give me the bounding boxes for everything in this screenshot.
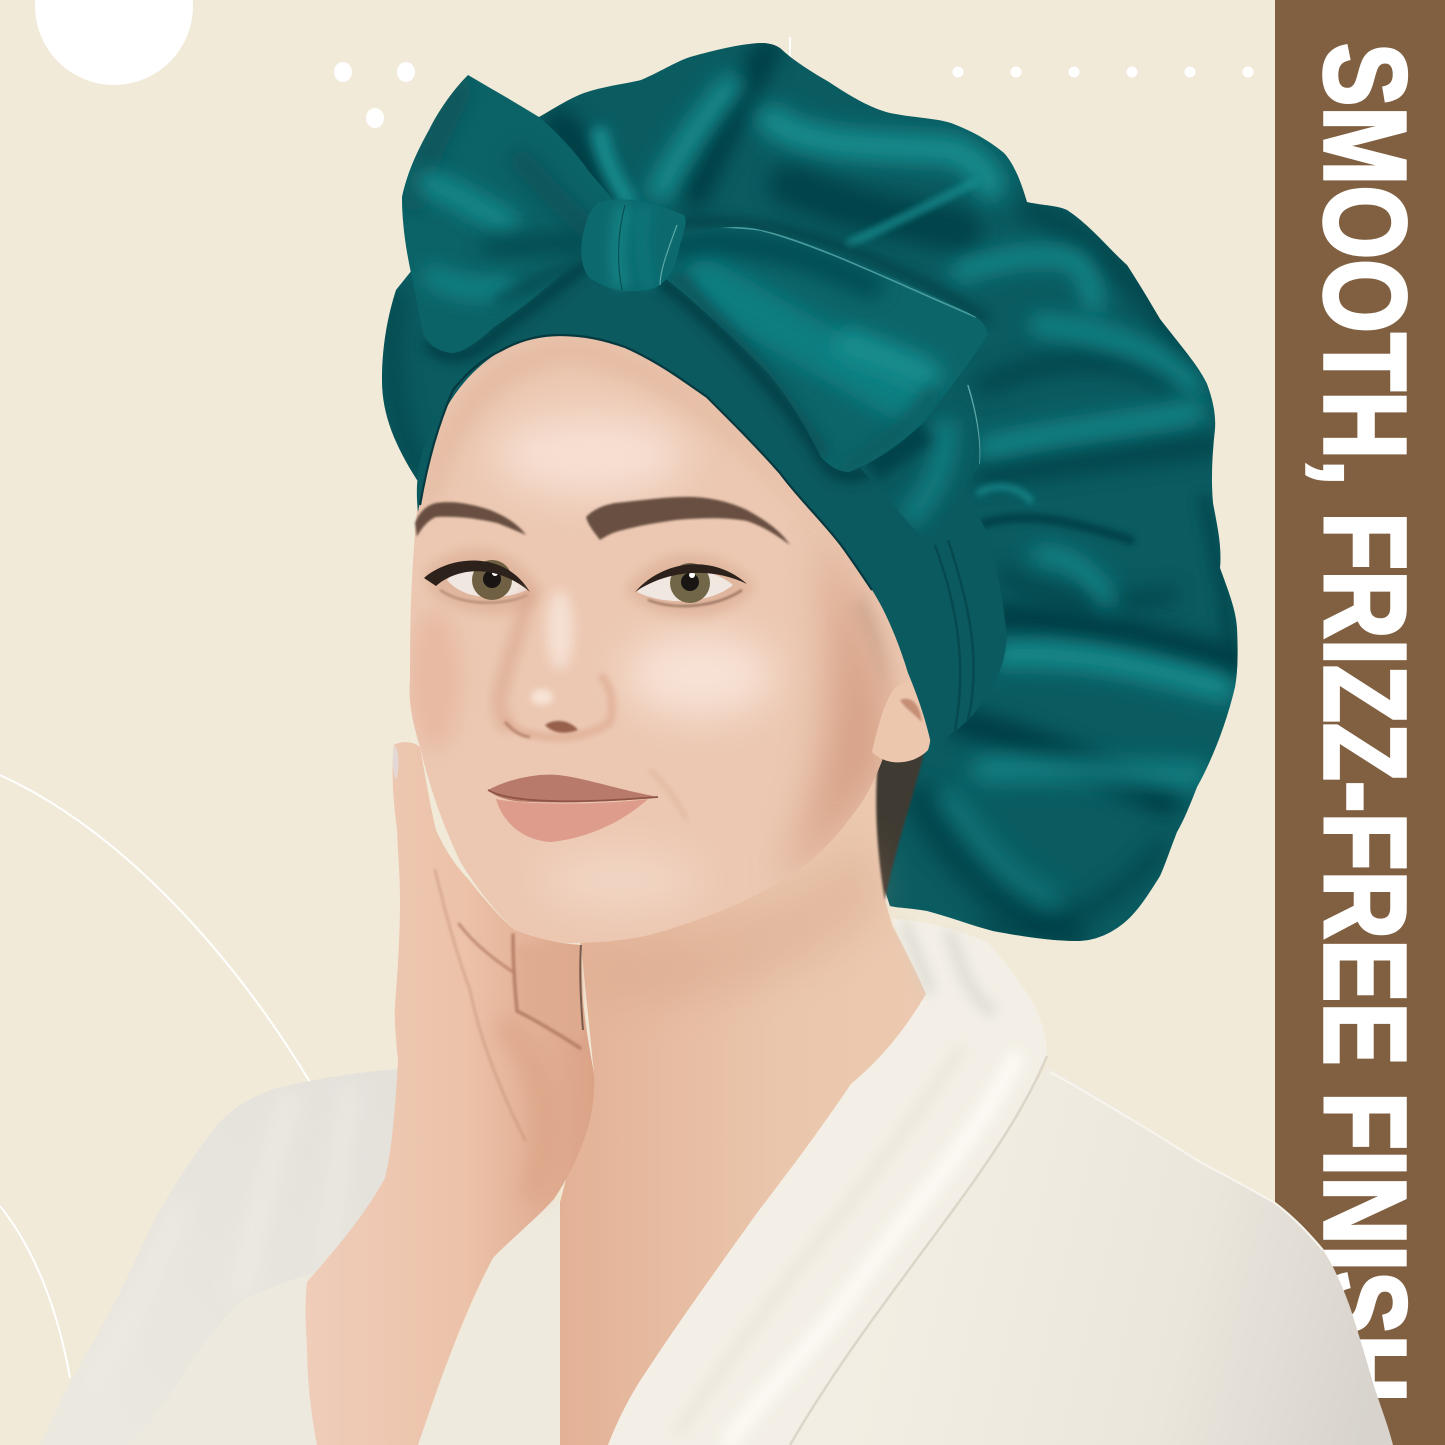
chin gap shadow: [580, 945, 583, 1030]
bonnet highlights: [600, 85, 1222, 900]
bonnet dark folds: [391, 50, 1230, 935]
left cheek blush: [410, 610, 460, 750]
bow left wing: [402, 75, 612, 353]
fingernail: [393, 745, 398, 780]
wing shading: [415, 90, 590, 300]
bow knot: [581, 199, 686, 291]
robe right body: [780, 1067, 1393, 1445]
bow tail: [860, 384, 980, 530]
side shadow: [780, 530, 889, 885]
bonnet puff: [360, 30, 1260, 960]
bow shadow: [430, 221, 985, 475]
robe left body: [40, 1069, 420, 1445]
hair under bonnet: [876, 745, 925, 900]
robe left folds: [90, 1090, 350, 1390]
wing shading: [680, 243, 930, 465]
head band: [417, 262, 1007, 748]
band forehead edge: [420, 335, 872, 590]
forehead highlight: [495, 413, 685, 497]
robe seam: [1050, 1072, 1323, 1250]
lips: [488, 775, 658, 842]
face: [400, 330, 930, 950]
ear: [872, 682, 931, 762]
forehead edge shade: [424, 336, 745, 496]
decorative dots cluster: [334, 62, 415, 128]
decorative white circle: [35, 0, 193, 85]
eyes: [424, 549, 755, 618]
neck and chest: [560, 740, 926, 1445]
smile line: [650, 770, 686, 820]
brown side panel: [1275, 0, 1445, 1445]
hand and arm: [306, 742, 594, 1445]
decorative dotted row: [952, 66, 1254, 78]
palm shading: [500, 1020, 544, 1200]
lower finger tone: [516, 945, 583, 1040]
robe collar: [608, 919, 1047, 1445]
eye socket shading: [425, 549, 540, 614]
lower face highlight: [552, 849, 688, 910]
collar stripes: [680, 925, 1015, 1440]
neck shadow: [600, 840, 885, 1002]
decorative arcs: [0, 37, 790, 1378]
temple hair: [856, 599, 884, 671]
eyebrows: [415, 497, 790, 545]
robe cuff: [128, 1272, 320, 1445]
cheek highlight: [625, 633, 775, 717]
bow right wing: [666, 227, 988, 472]
band pleat lines: [935, 540, 974, 730]
finger creases: [435, 870, 580, 1140]
inner robe panel: [410, 1199, 560, 1445]
nose: [499, 590, 612, 737]
